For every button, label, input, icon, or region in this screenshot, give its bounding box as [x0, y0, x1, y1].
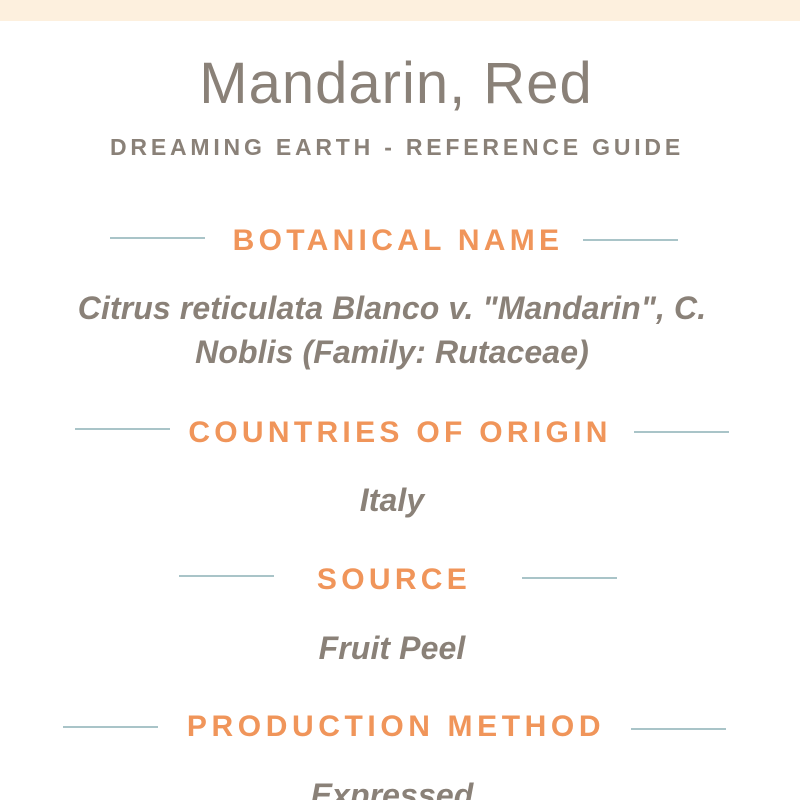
title: Mandarin, Red: [199, 51, 593, 116]
heading: botanical name: BOTANICAL NAME: [233, 224, 563, 257]
heading: source: SOURCE: [317, 563, 471, 596]
text: botanical name: Noblis (Family: Rutaceae): [195, 334, 589, 370]
text: origin: Italy: [360, 482, 424, 518]
top band: [0, 0, 800, 21]
text: source: Fruit Peel: [319, 630, 465, 666]
text: botanical name: [78, 290, 706, 370]
text: botanical name: Citrus reticulata Blanco v. "Mandarin", C.: [78, 290, 706, 326]
heading: production method: PRODUCTION METHOD: [187, 710, 605, 743]
heading: countries of origin: COUNTRIES OF ORIGIN: [188, 416, 612, 449]
subtitle: DREAMING EARTH - REFERENCE GUIDE: [110, 134, 684, 160]
